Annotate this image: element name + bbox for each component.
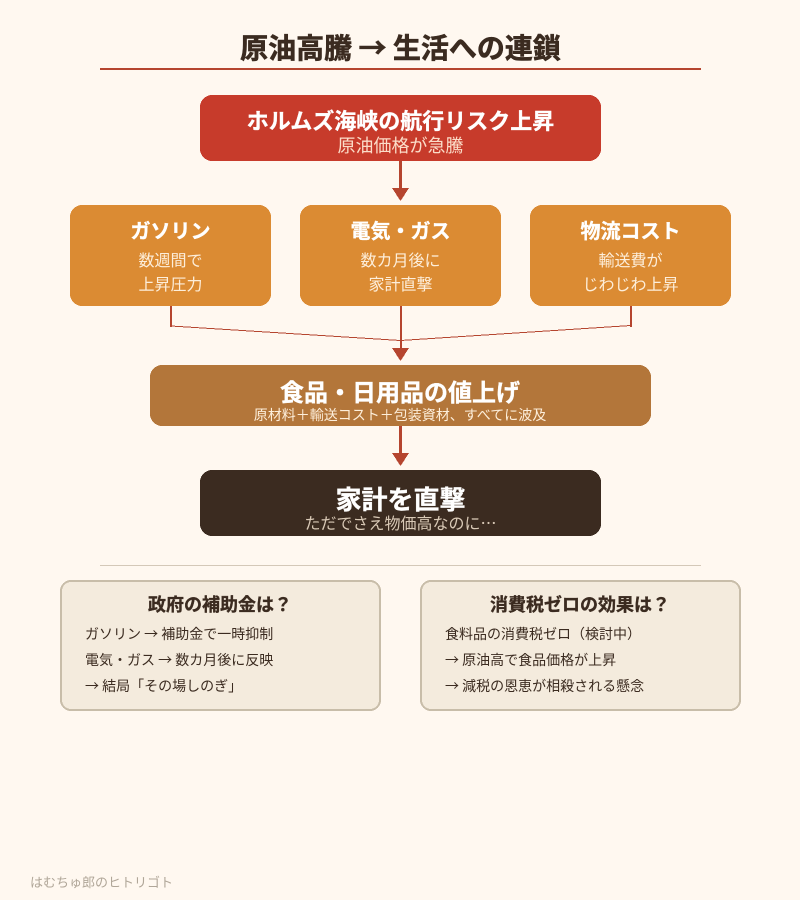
panel: Hormuz risk: 原油価格が急騰	[338, 132, 464, 158]
panel: logistics cost	[530, 205, 731, 306]
arrow: converging connectors	[170, 306, 632, 361]
panel: food and daily goods: 原材料＋輸送コスト＋包装資材、すべてに波及	[254, 405, 546, 425]
panel: logistics cost: じわじわ上昇	[582, 271, 679, 295]
panel: logistics cost: 輸送費が	[598, 247, 663, 271]
panel: consumption tax: → 原油高で食品価格が上昇	[445, 650, 616, 670]
panel: gasoline: ガソリン	[130, 215, 210, 244]
panel: government subsidy: 政府の補助金は？	[148, 591, 292, 617]
panel: Hormuz risk	[200, 95, 601, 161]
panel: electricity and gas: 電気・ガス	[350, 215, 450, 244]
title: 原油高騰 → 生活への連鎖	[240, 27, 561, 67]
panel: logistics cost: 物流コスト	[580, 215, 680, 244]
panel: electricity and gas: 家計直撃	[368, 271, 433, 295]
panel: food and daily goods	[150, 365, 651, 426]
panel: gasoline: 数週間で	[138, 247, 203, 271]
panel: household impact: 家計を直撃	[335, 480, 466, 517]
panel: government subsidy: → 結局「その場しのぎ」	[85, 676, 242, 696]
panel: electricity and gas: 数カ月後に	[360, 247, 441, 271]
panel: consumption tax	[421, 581, 740, 710]
panel: consumption tax: 消費税ゼロの効果は？	[490, 591, 670, 617]
panel: gasoline: 上昇圧力	[138, 271, 203, 295]
footer credit: はむちゅ郎のヒトリゴト	[30, 872, 173, 891]
panel: household impact: ただでさえ物価高なのに…	[304, 510, 497, 534]
panel: consumption tax: 食料品の消費税ゼロ（検討中）	[445, 624, 641, 644]
panel: gasoline	[70, 205, 271, 306]
panel: electricity and gas	[300, 205, 501, 306]
panel: government subsidy: ガソリン → 補助金で一時抑制	[85, 624, 273, 644]
panel: government subsidy: 電気・ガス → 数カ月後に反映	[85, 650, 273, 670]
panel: consumption tax: → 減税の恩恵が相殺される懸念	[445, 676, 644, 696]
panel: food and daily goods: 食品・日用品の値上げ	[280, 373, 520, 408]
panel: Hormuz risk: ホルムズ海峡の航行リスク上昇	[247, 104, 554, 136]
arrow: food to household	[392, 426, 409, 466]
panel: household impact	[200, 470, 601, 536]
panel: government subsidy	[61, 581, 380, 710]
arrow: risk to three costs	[392, 161, 409, 201]
